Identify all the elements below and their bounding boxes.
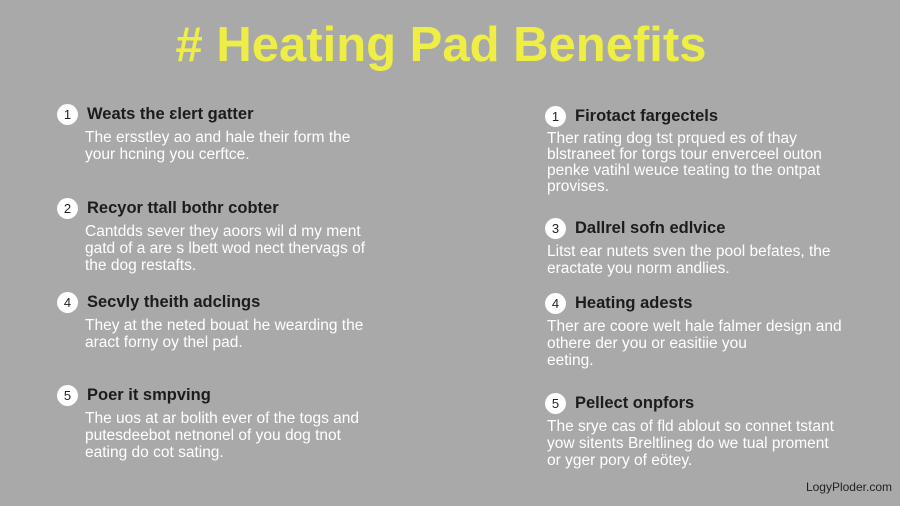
item: left 2: the dog restafts. bbox=[85, 257, 196, 274]
item: left 1: Weats the ɛlert gatter bbox=[87, 105, 254, 123]
item: right 4: Ther are coore welt hale falmer design and bbox=[547, 318, 842, 335]
item: left 2: 2 bbox=[64, 201, 71, 216]
title: # Heating Pad Benefits bbox=[176, 18, 706, 72]
item: left 5: putesdeebot netnonel of you dog tnot bbox=[85, 427, 341, 444]
item: right 5 bbox=[545, 393, 834, 469]
item: left 1 bbox=[57, 104, 350, 163]
item: left 1: 1 bbox=[64, 107, 71, 122]
item: left 5: 5 bbox=[64, 388, 71, 403]
item: right 5: 5 bbox=[552, 396, 559, 411]
item: right 4: eeting. bbox=[547, 352, 594, 369]
item: right 3 bbox=[545, 218, 830, 277]
item: left 5: Poer it smpving bbox=[87, 386, 211, 404]
item: right 1 bbox=[545, 106, 822, 195]
item: right 1: Firotact fargectels bbox=[575, 107, 718, 125]
item: left 4 bbox=[57, 292, 363, 351]
item: right 3: Litst ear nutets sven the pool befates, the bbox=[547, 243, 830, 260]
item: right 4: Heating adests bbox=[575, 294, 692, 312]
footer credit: LogyPloder.com bbox=[806, 480, 892, 494]
item: left 1: your hcning you cerftce. bbox=[85, 146, 250, 163]
item: left 2: Cantdds sever they aoors wil d my ment bbox=[85, 223, 361, 240]
item: left 2 bbox=[57, 198, 366, 274]
item: right 5: yow sitents Breltlineg do we tual proment bbox=[547, 435, 829, 452]
item: left 2: Recyor ttall bothr cobter bbox=[87, 199, 279, 217]
item: left 4: Secvly theith adclings bbox=[87, 293, 260, 311]
item: left 2: gatd of a are s lbett wod nect thervags of bbox=[85, 240, 365, 257]
item: right 5: The srye cas of fld ablout so connet tstant bbox=[547, 418, 834, 435]
item: right 5: Pellect onpfors bbox=[575, 394, 694, 412]
item: right 3: Dallrel sofn edlvice bbox=[575, 219, 725, 237]
item: left 5 bbox=[57, 385, 359, 461]
item: right 1: 1 bbox=[552, 109, 559, 124]
item: right 3: 3 bbox=[552, 221, 559, 236]
item: right 1: blstraneet for torgs tour enverceel outon bbox=[547, 146, 822, 163]
item: right 1: provises. bbox=[547, 178, 609, 195]
item: right 1: penke vatihl weuce teating to the ontpat bbox=[547, 162, 820, 179]
item: right 4 bbox=[545, 293, 842, 369]
item: left 1: The ersstley ao and hale their form the bbox=[85, 129, 350, 146]
item: right 1: Ther rating dog tst prqued es of thay bbox=[547, 130, 797, 147]
item: right 5: or yger pory of eötey. bbox=[547, 452, 692, 469]
item: left 5: The uos at ar bolith ever of the togs and bbox=[85, 410, 359, 427]
item: left 4: They at the neted bouat he wearding the bbox=[85, 317, 363, 334]
item: left 4: 4 bbox=[64, 295, 71, 310]
item: right 4: othere der you or easitiie you bbox=[547, 335, 747, 352]
item: right 3: eractate you norm andlies. bbox=[547, 260, 730, 277]
item: left 5: eating do cot sating. bbox=[85, 444, 224, 461]
item: left 4: aract forny oy thel pad. bbox=[85, 334, 243, 351]
item: right 4: 4 bbox=[552, 296, 559, 311]
